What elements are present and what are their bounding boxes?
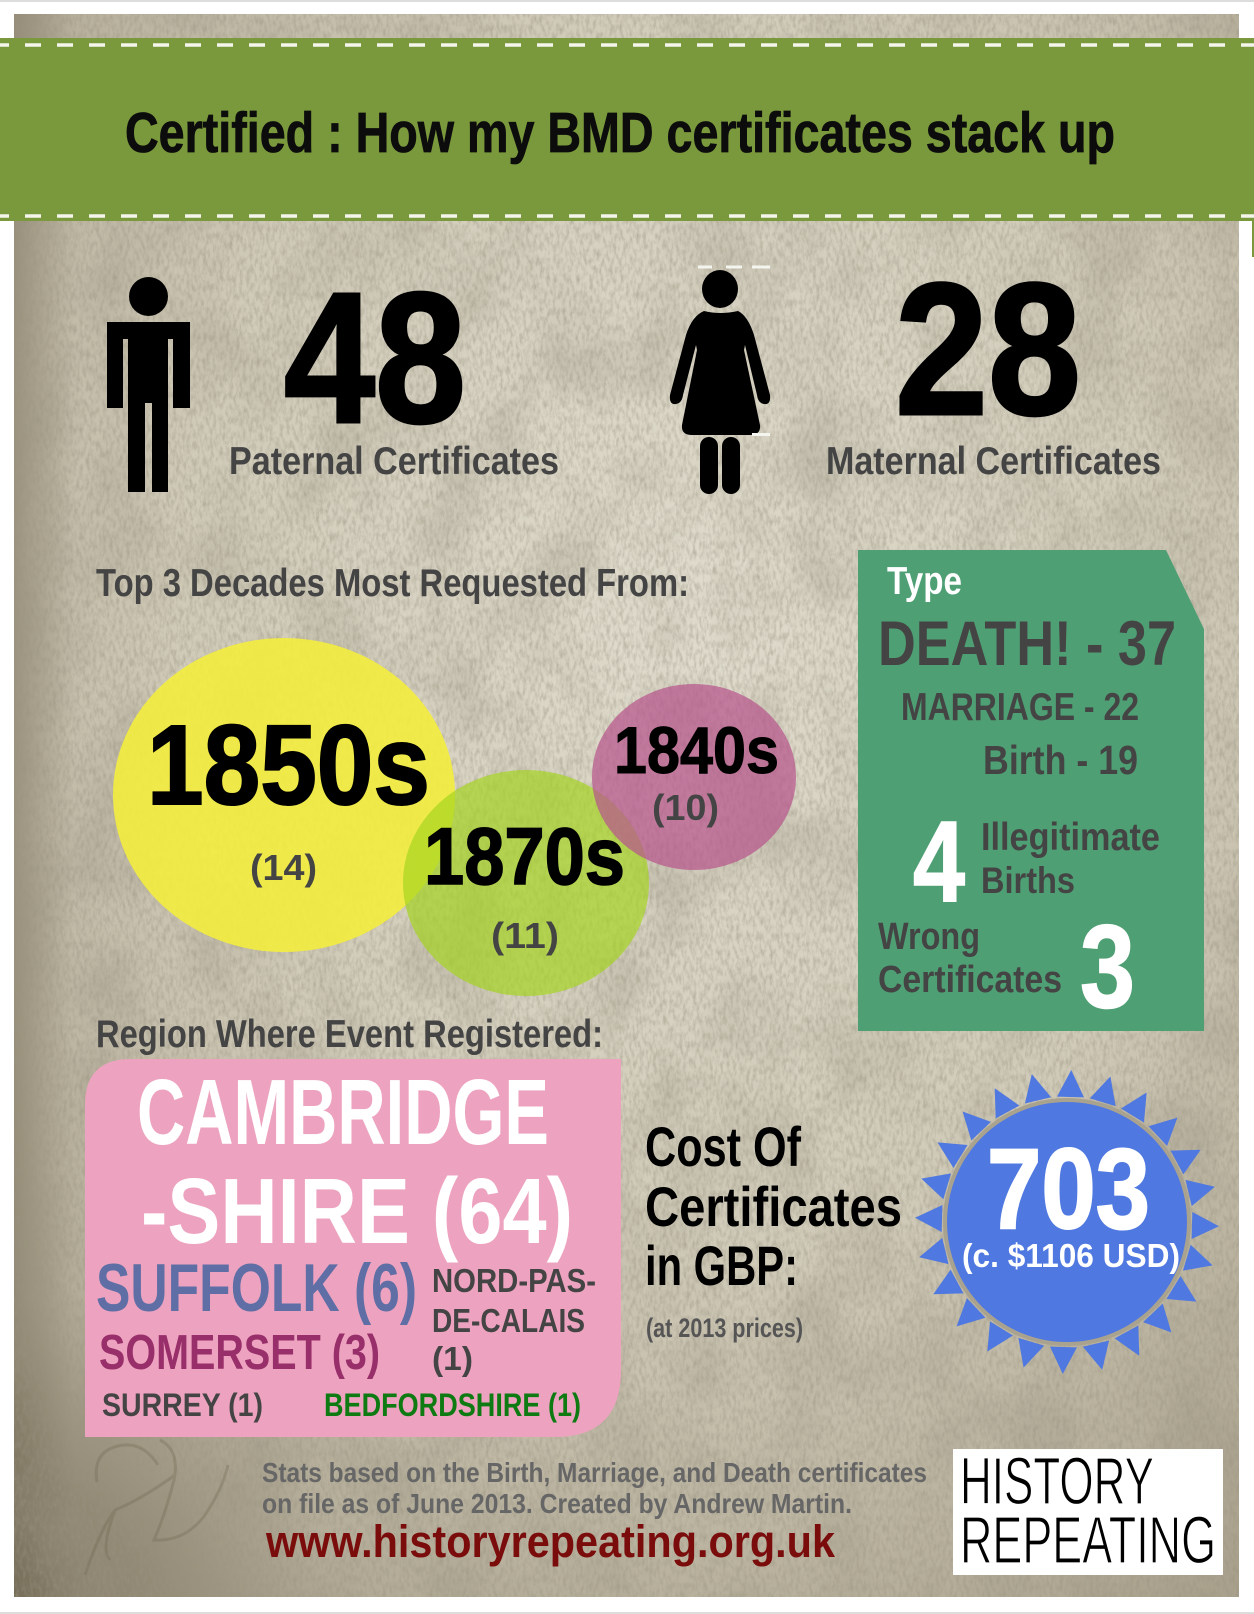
illegitimate label: Illegitimate [981, 816, 1160, 859]
cost note: (at 2013 prices) [646, 1313, 803, 1343]
footer note: on file as of June 2013. Created by Andrew Martin. [262, 1488, 852, 1519]
count: 14: (14) [250, 847, 317, 888]
birth count: Birth - 19 [983, 737, 1138, 783]
badge: cost [915, 1070, 1219, 1374]
cambridgeshire: CAMBRIDGE [137, 1060, 549, 1164]
cost heading [645, 1115, 902, 1297]
marriage count: MARRIAGE - 22 [901, 686, 1139, 729]
panel: regions [85, 1059, 621, 1437]
maternal count: 28 [895, 244, 1081, 454]
panel: certificate type [858, 550, 1204, 1033]
somerset: SOMERSET (3) [99, 1326, 380, 1380]
nord-pas-de-calais: NORD-PAS- [432, 1262, 596, 1299]
bubble chart: decades [113, 638, 796, 996]
panel: regions: DE-CALAIS [432, 1302, 585, 1339]
paternal count: 48 [284, 255, 466, 462]
cost heading: Certificates [645, 1175, 902, 1238]
surrey: SURREY (1) [102, 1387, 263, 1423]
logo: history repeating: HISTORY [960, 1444, 1154, 1519]
website link: www.historyrepeating.org.uk [265, 1516, 836, 1567]
suffolk: SUFFOLK (6) [96, 1250, 417, 1326]
panel: certificate type: Births [981, 860, 1075, 901]
heading: top decades: Top 3 Decades Most Requested From: [96, 562, 689, 605]
logo: history repeating [953, 1444, 1223, 1578]
paternal label: Paternal Certificates [229, 440, 559, 483]
type heading: Type [887, 560, 962, 603]
illegitimate count: 4 [913, 798, 965, 926]
bubble: 1850s [113, 638, 455, 952]
label: 1850s: 1850s [147, 702, 430, 828]
death count: DEATH! - 37 [878, 609, 1176, 679]
bedfordshire: BEDFORDSHIRE (1) [324, 1387, 581, 1423]
footer note: Stats based on the Birth, Marriage, and Death certificates [262, 1457, 927, 1488]
panel: regions: (1) [432, 1340, 473, 1377]
bubble: 1870s [403, 770, 649, 996]
label: 1870s: 1870s [424, 812, 625, 902]
cost heading: in GBP: [645, 1234, 798, 1297]
usd value: (c. $1106 USD) [962, 1237, 1180, 1274]
count: 11: (11) [491, 915, 559, 956]
cost heading: Cost Of [645, 1115, 801, 1178]
icon: man [107, 277, 190, 492]
panel: regions: -SHIRE (64) [141, 1159, 573, 1263]
heading: region: Region Where Event Registered: [96, 1013, 603, 1056]
label: 1840s: 1840s [614, 713, 779, 787]
footer note [262, 1457, 927, 1519]
wrong count: 3 [1080, 901, 1135, 1033]
maternal label: Maternal Certificates [826, 440, 1161, 483]
icon: woman [670, 267, 770, 494]
cost value: 703 [987, 1126, 1150, 1253]
bubble: 1840s [592, 684, 796, 870]
panel: certificate type: Certificates [878, 959, 1062, 1001]
count: 10: (10) [652, 787, 719, 828]
wrong label: Wrong [878, 916, 980, 958]
title banner [0, 38, 1254, 257]
